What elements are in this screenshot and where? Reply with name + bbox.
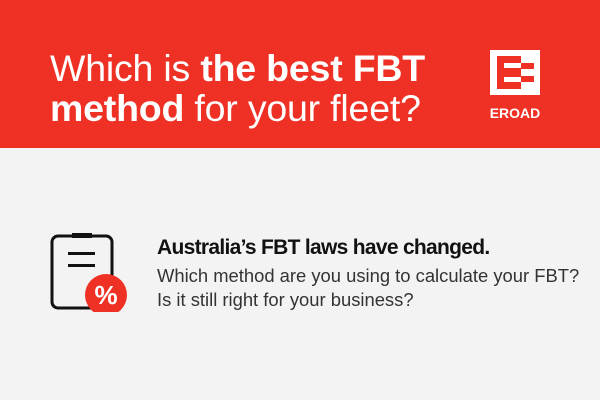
title <box>50 47 425 129</box>
body text <box>157 265 579 310</box>
body text: Is it still right for your business? <box>157 289 414 310</box>
logo: EROAD: EROAD <box>490 105 540 121</box>
title: method for your fleet? <box>50 87 421 129</box>
icon: clipboard with percent: % <box>94 280 118 310</box>
heading: Australia’s FBT laws have changed. <box>157 236 490 259</box>
icon: clipboard with percent <box>50 233 127 312</box>
title: Which is the best FBT <box>50 47 425 89</box>
body text: Which method are you using to calculate your FBT? <box>157 265 579 286</box>
header banner <box>0 0 600 148</box>
logo: EROAD <box>490 50 540 121</box>
